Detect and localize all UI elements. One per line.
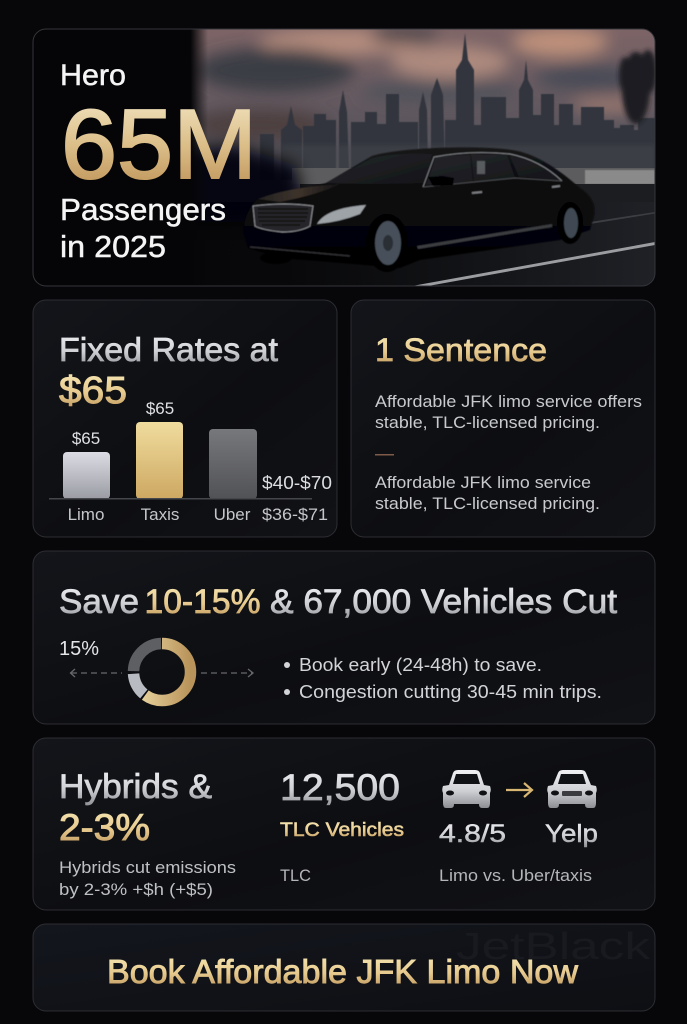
bullet list [284,655,602,702]
sentence text one [375,392,642,432]
arrow: right [201,669,253,677]
bar chart: $65 [72,429,100,448]
bar chart: $36-$71 [262,505,328,524]
heading: hybrids: Hybrids & [59,768,212,806]
hero stat: 65M: 65M [61,89,257,199]
panel: fixed rates [33,300,337,537]
skyline lower haze [282,148,652,168]
panel: 1 sentence [351,300,655,537]
rating: 4.8/5: 4.8/5 [439,820,506,848]
arrow: left [70,669,122,677]
icon: car left [442,770,491,808]
short divider [375,454,394,456]
hero border [33,29,655,286]
bar chart [49,399,332,524]
call to action text: Book Affordable JFK Limo Now [107,953,578,990]
heading: savings: & 67,000 Vehicles Cut [270,583,618,621]
hybrids note: Hybrids cut emissions [59,858,236,877]
stat: 12,500: 12,500 [280,767,400,808]
bullet list: Book early (24-48h) to save. [299,655,542,675]
road [192,202,654,286]
donut label: 15% [59,638,99,660]
heading value: $65: $65 [59,370,127,412]
hero caption [60,192,226,264]
heading: savings: Save [59,583,139,621]
TLC caption: TLC [280,866,311,885]
rating source: Yelp: Yelp [545,820,598,848]
lower left dark foliage and shadow [192,136,310,202]
hero label: Hero [60,59,126,92]
heading: savings: 10-15% [144,583,260,621]
comparison caption: Limo vs. Uber/taxis [439,866,592,885]
stat label: TLC vehicles: TLC Vehicles [280,820,404,841]
panel: hybrids and vehicles [33,738,655,910]
bar chart: Uber [214,505,251,524]
stat: 2-3%: 2-3% [59,807,150,848]
sunset clouds [190,27,648,141]
icon: car right [547,770,597,808]
left fade [34,30,207,202]
sentence text one: Affordable JFK limo service offers [375,392,642,411]
hero photo: skyline and limousine [192,30,654,286]
hybrids note [59,858,236,899]
donut chart [134,644,190,700]
city skyline [260,33,655,180]
bar chart: Limo [68,505,104,524]
sentence text two: stable, TLC-licensed pricing. [375,494,600,513]
bar chart: Taxis [141,505,179,524]
sentence text one: stable, TLC-licensed pricing. [375,413,600,432]
panel: hero [33,27,657,286]
limousine [243,147,594,272]
bar chart: $40-$70 [262,473,332,493]
water [292,168,655,184]
bar chart: $65 [146,399,174,418]
sentence text two [375,473,600,513]
heading: fixed rates: Fixed Rates at [59,331,278,368]
watermark: JetBlack [456,926,651,968]
bullet list: Congestion cutting 30-45 min trips. [299,682,602,702]
hybrids note: by 2-3% +$h (+$5) [59,880,213,899]
arrow: car to car [506,783,532,797]
hero caption: Passengers [60,192,226,227]
right tree [619,50,657,124]
hero caption: in 2025 [60,229,166,264]
heading: savings [59,583,618,621]
guard rail [300,184,655,202]
panel: savings [33,551,655,724]
sentence text two: Affordable JFK limo service [375,473,591,492]
panel: call to action [33,924,655,1011]
heading: 1 sentence: 1 Sentence [375,332,547,368]
